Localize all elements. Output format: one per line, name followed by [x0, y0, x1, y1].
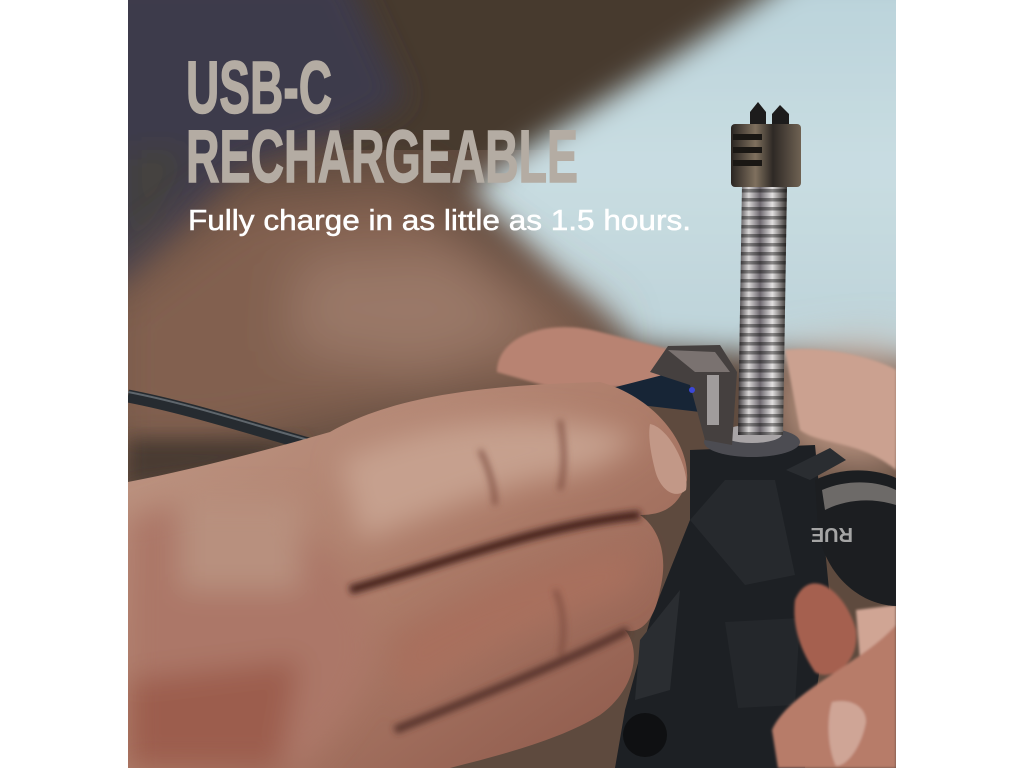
- title: [188, 60, 577, 184]
- subtitle: Fully charge in as little as 1.5 hours.: [188, 205, 691, 237]
- title: USB-C: [186, 46, 332, 129]
- front hand: [128, 382, 687, 768]
- USB-C plug and port: [612, 345, 737, 445]
- lighter body: [615, 425, 830, 768]
- cable: [128, 396, 312, 445]
- lighter cap: RUE: [811, 523, 853, 545]
- lighter cap: [786, 448, 896, 606]
- right hand behind: [497, 327, 896, 768]
- photo: hands charging a lighter over USB-C: [128, 0, 896, 768]
- chrome electrode: [731, 102, 801, 435]
- title: RECHARGEABLE: [186, 115, 578, 198]
